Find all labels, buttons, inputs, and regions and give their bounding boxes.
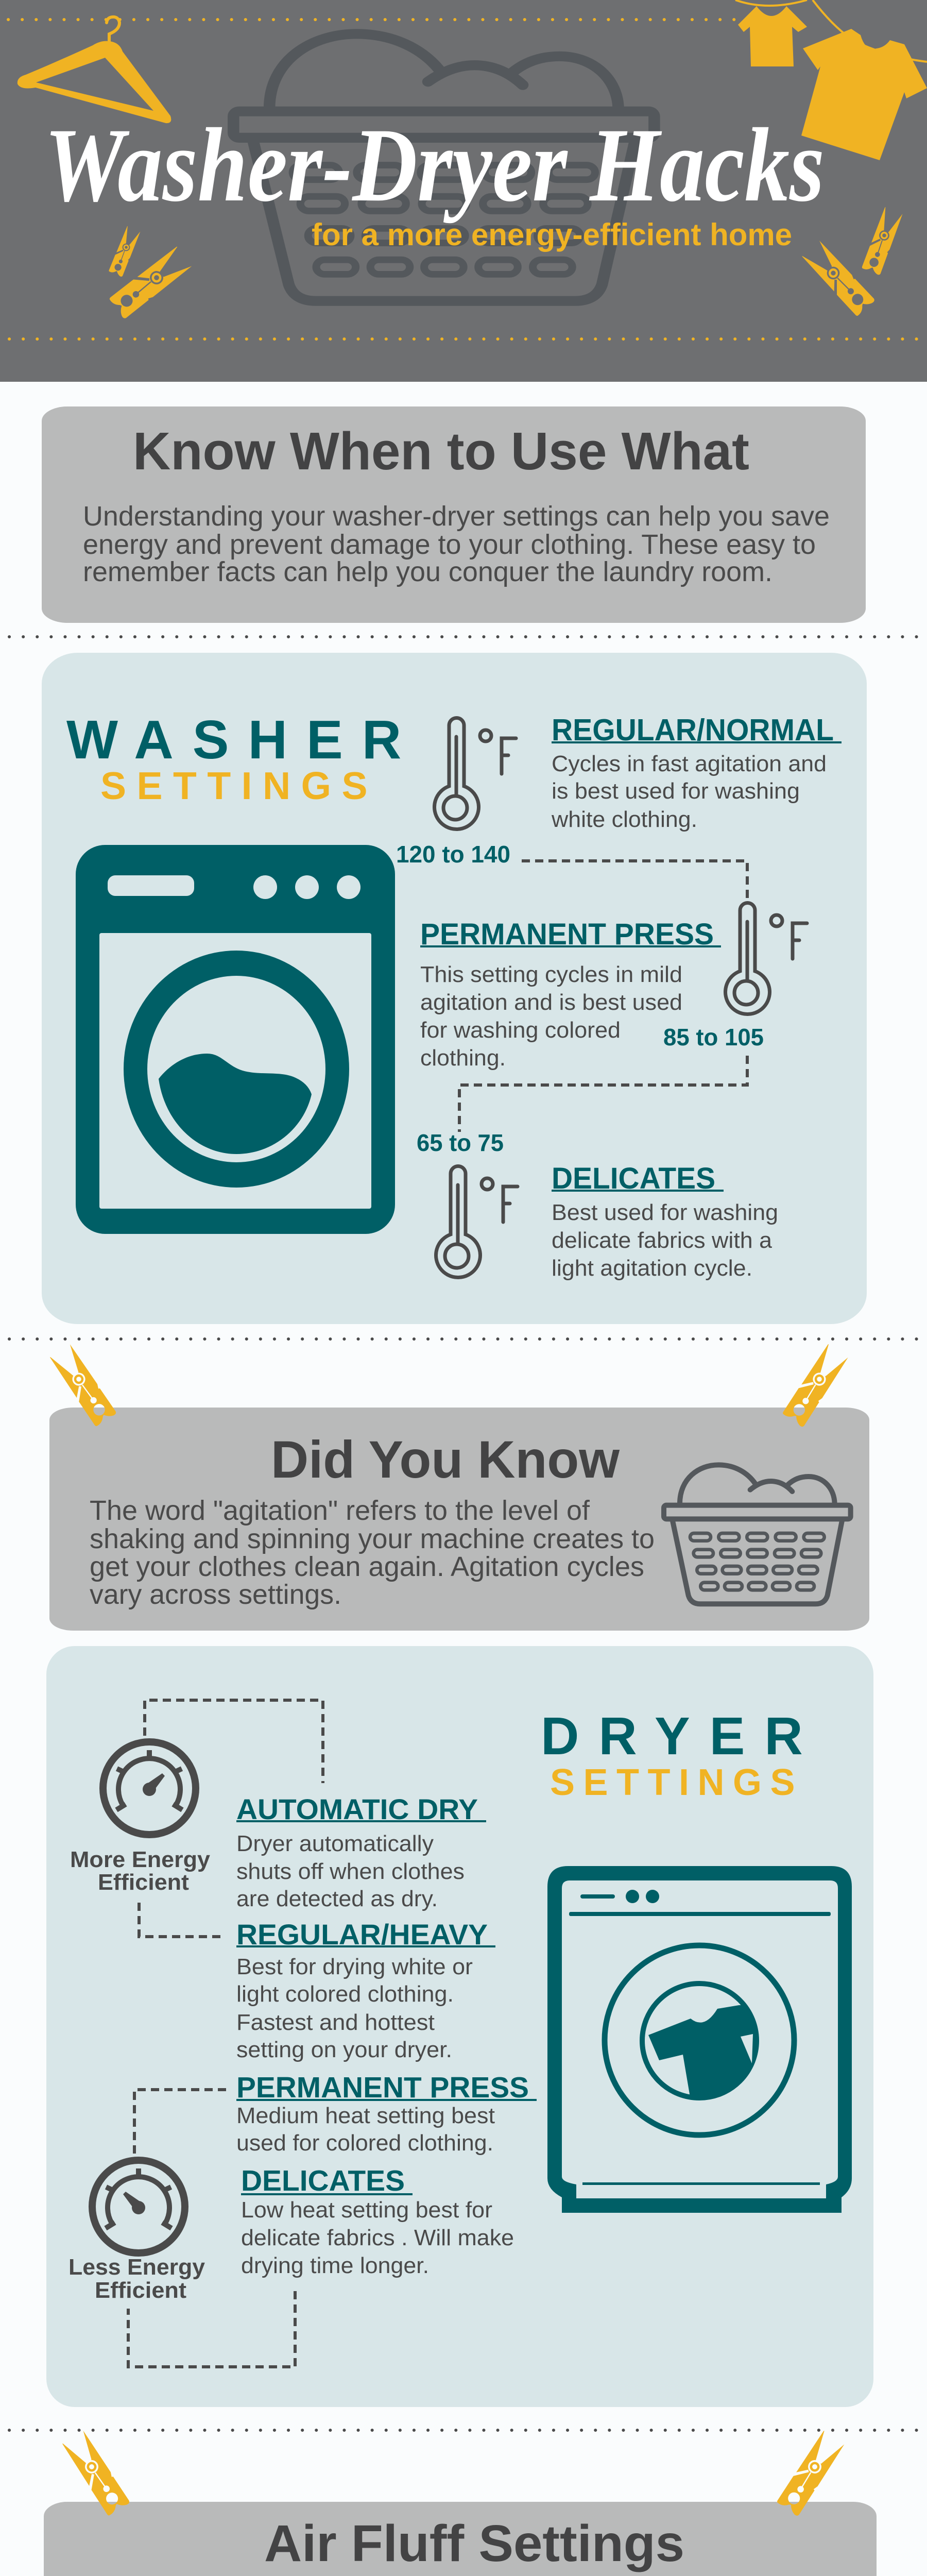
connector: more efficient to regular/heavy <box>139 1903 221 1937</box>
text: delicates: Low heat setting best for <box>241 2197 492 2223</box>
text block: energy and prevent damage to your clothing. These easy to <box>83 529 816 560</box>
label: more energy efficient: More Energy <box>70 1847 211 1872</box>
heading: regular/normal: REGULAR/NORMAL <box>552 713 834 747</box>
text: permanent press: Medium heat setting best <box>236 2103 495 2128</box>
text: permanent press: This setting cycles in mild <box>420 962 682 987</box>
label: less energy efficient: Efficient <box>95 2278 186 2303</box>
icon: clothes hanger <box>18 17 171 123</box>
icon: gauge less energy efficient <box>92 2160 185 2253</box>
icon: clothespin left large <box>108 241 193 324</box>
connector: regular to permanent press <box>522 861 747 901</box>
text: delicates: Best used for washing <box>552 1200 778 1225</box>
icon: clothespin right <box>763 2427 858 2519</box>
text: regular/heavy: Best for drying white or <box>236 1954 473 1979</box>
text: regular/heavy <box>236 1954 473 2062</box>
text: delicates <box>241 2197 514 2278</box>
heading: Did You Know <box>271 1430 620 1489</box>
label: less energy efficient <box>68 2255 205 2303</box>
heading: permanent press: PERMANENT PRESS <box>420 918 714 951</box>
icon: thermometer permanent press <box>725 903 807 1014</box>
text: delicates: light agitation cycle. <box>552 1256 752 1281</box>
panel: dryer settings <box>46 1646 873 2407</box>
label: 65 to 75: 65 to 75 <box>417 1129 504 1156</box>
label: more energy efficient: Efficient <box>98 1870 189 1895</box>
text block: vary across settings. <box>90 1579 341 1610</box>
text: delicates <box>552 1200 778 1281</box>
text: regular/normal: is best used for washing <box>552 778 800 804</box>
text block <box>90 1495 655 1610</box>
text: delicates: delicate fabrics with a <box>552 1228 772 1253</box>
panel: air fluff settings <box>44 2502 877 2576</box>
panel: know when to use what <box>42 406 866 623</box>
text: automatic dry <box>236 1831 465 1911</box>
connector: delicates to less efficient <box>128 2291 295 2367</box>
text: regular/normal: Cycles in fast agitation and <box>552 751 827 776</box>
icon: clothespin left small <box>95 222 154 280</box>
text: permanent press: used for colored clothing. <box>236 2130 493 2156</box>
text: regular/heavy: light colored clothing. <box>236 1981 454 2007</box>
text: permanent press: clothing. <box>420 1045 506 1071</box>
text: permanent press: agitation and is best used <box>420 990 682 1015</box>
label: 120 to 140: 120 to 140 <box>396 841 510 868</box>
panel: washer settings <box>42 653 867 1324</box>
icon: laundry basket <box>664 1465 851 1604</box>
text: regular/normal <box>551 751 827 832</box>
icon: clothes dryer <box>547 1866 852 2213</box>
icon: clothesline with t-shirts <box>735 0 927 160</box>
text: automatic dry: Dryer automatically <box>236 1831 434 1856</box>
heading: Air Fluff Settings <box>264 2515 684 2572</box>
text: regular/normal: white clothing. <box>551 807 697 832</box>
heading: settings: SETTINGS <box>550 1762 803 1803</box>
icon: clothespin right <box>769 1341 862 1431</box>
connector: permanent press to delicates <box>459 1056 747 1132</box>
text block: shaking and spinning your machine creates to <box>90 1523 655 1554</box>
text: delicates: delicate fabrics . Will make <box>241 2225 514 2250</box>
subtitle: for a more energy-efficient home <box>312 217 792 252</box>
text block: The word "agitation" refers to the level of <box>90 1495 590 1526</box>
icon: clothespin left <box>52 2428 140 2518</box>
icon: thermometer regular <box>435 718 516 829</box>
icon: gauge more energy efficient <box>103 1742 196 1835</box>
heading: Know When to Use What <box>133 421 749 481</box>
text: regular/heavy: Fastest and hottest <box>236 2010 435 2035</box>
text: permanent press: for washing colored <box>420 1018 621 1043</box>
text block: remember facts can help you conquer the laundry room. <box>83 556 772 587</box>
icon: clothespin right small <box>843 201 922 280</box>
heading: permanent press: PERMANENT PRESS <box>236 2071 529 2104</box>
icon: washing machine <box>76 845 395 1234</box>
text: regular/heavy: setting on your dryer. <box>236 2037 452 2062</box>
heading: delicates: DELICATES <box>241 2164 405 2197</box>
heading: delicates: DELICATES <box>552 1162 715 1195</box>
text block: get your clothes clean again. Agitation cycles <box>90 1551 644 1582</box>
heading: regular/heavy: REGULAR/HEAVY <box>236 1918 488 1951</box>
icon: shirt in dryer <box>648 2005 754 2095</box>
heading: settings: SETTINGS <box>100 764 378 807</box>
text: automatic dry: are detected as dry. <box>236 1886 438 1911</box>
connector: gauge to automatic dry <box>145 1700 323 1783</box>
heading: dryer: DRYER <box>541 1706 822 1766</box>
panel: did you know <box>49 1408 869 1631</box>
text block: Understanding your washer-dryer settings can help you save <box>83 501 830 532</box>
label: less energy efficient: Less Energy <box>68 2255 205 2280</box>
header banner <box>0 0 927 382</box>
label: 85 to 105: 85 to 105 <box>663 1024 764 1050</box>
icon: clothespin left <box>41 1342 125 1429</box>
heading: washer: WASHER <box>66 709 420 770</box>
text: delicates: drying time longer. <box>241 2253 429 2278</box>
text block <box>83 501 830 587</box>
text: permanent press <box>236 2103 495 2156</box>
text: automatic dry: shuts off when clothes <box>236 1859 465 1884</box>
heading: automatic dry: AUTOMATIC DRY <box>236 1793 478 1825</box>
text: permanent press <box>420 962 682 1071</box>
icon: clothespin right large <box>802 241 874 316</box>
icon: laundry basket background <box>233 34 654 301</box>
icon: thermometer delicates <box>436 1166 518 1277</box>
label: more energy efficient <box>70 1847 211 1895</box>
connector: permanent press to gauge <box>134 2090 226 2155</box>
